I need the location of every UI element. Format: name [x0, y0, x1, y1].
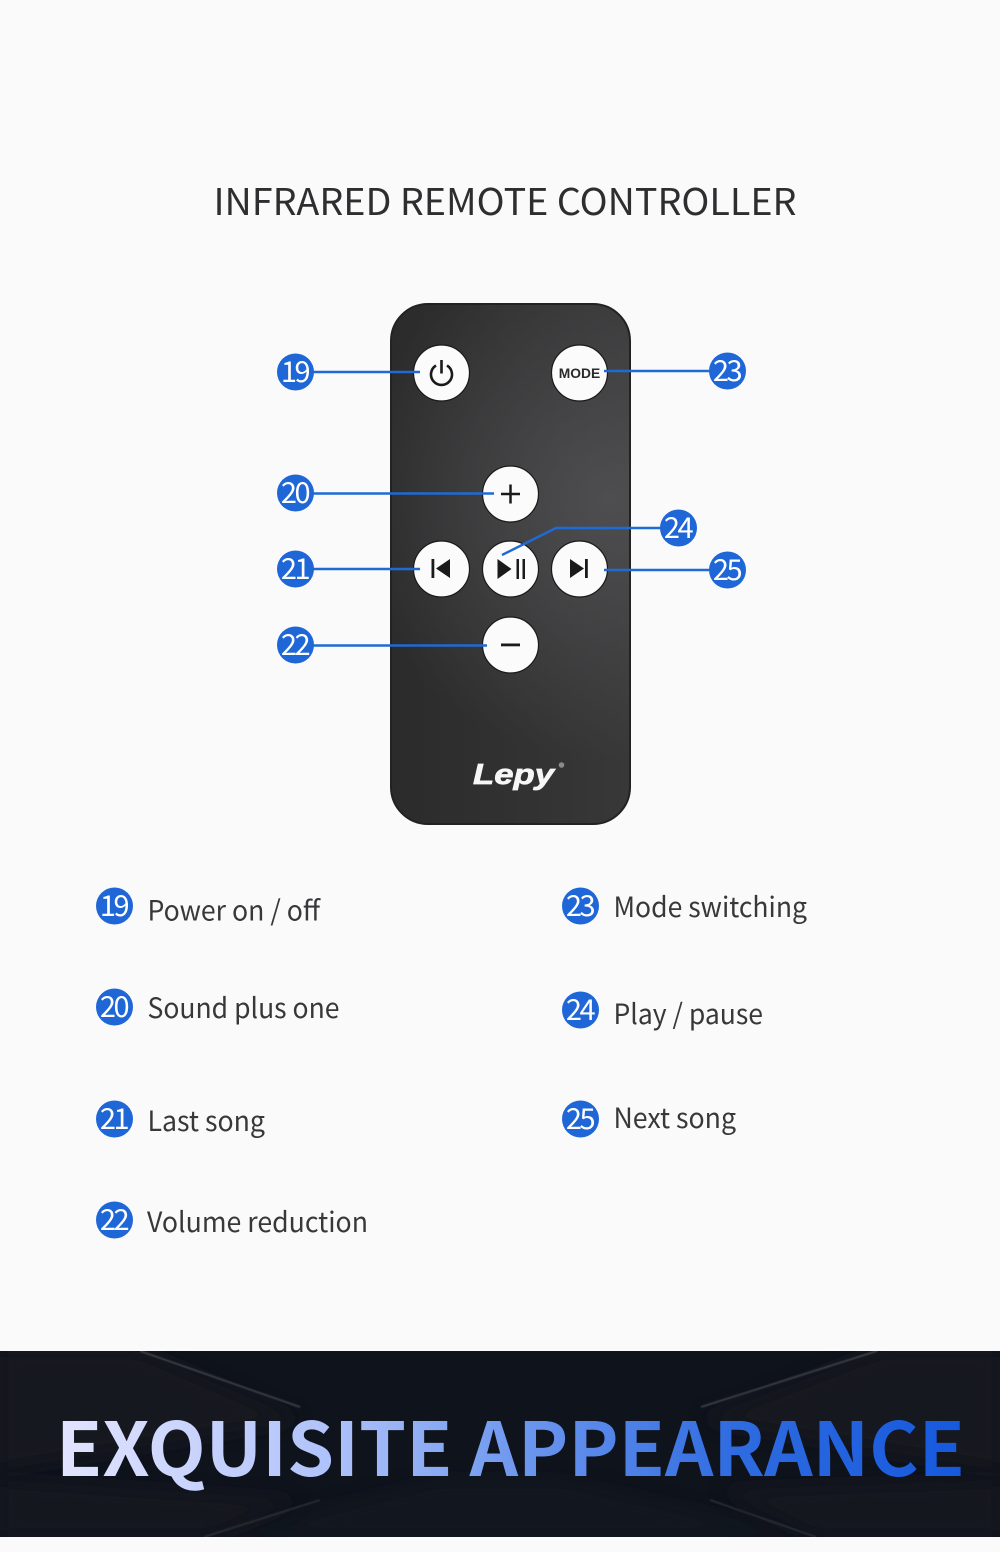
- legend item 23: Mode switching: [614, 886, 807, 926]
- button: previous: [414, 541, 470, 597]
- legend item 25: 25: [566, 1096, 594, 1138]
- button: next: [552, 541, 608, 597]
- banner heading: EXQUISITE APPEARANCE: [56, 1391, 965, 1498]
- legend item 22: Volume reduction: [147, 1201, 368, 1241]
- legend item 20: Sound plus one: [148, 987, 340, 1027]
- button: power: [414, 345, 470, 401]
- legend item 21: 21: [100, 1096, 128, 1138]
- legend item 23: 23: [566, 883, 594, 925]
- legend item 21: Last song: [148, 1100, 265, 1140]
- legend item 24: 24: [566, 987, 595, 1029]
- legend item 19: 19: [100, 883, 128, 925]
- button: mode: [552, 345, 608, 401]
- remote body: [391, 304, 630, 824]
- badge 19: 19: [281, 349, 309, 391]
- legend item 19: Power on / off: [148, 890, 321, 930]
- badge 23: 23: [713, 348, 741, 390]
- remote control: [391, 304, 630, 824]
- legend item 25: Next song: [614, 1097, 736, 1137]
- title: INFRARED REMOTE CONTROLLER: [214, 172, 796, 226]
- legend item 24: Play / pause: [614, 993, 763, 1033]
- banner background: [0, 1351, 1000, 1537]
- legend item 25: [562, 1096, 736, 1138]
- banner: [0, 1351, 1000, 1537]
- leader lines: [313, 371, 710, 646]
- brand logo: Lepy: [473, 759, 556, 791]
- legend item 21: [96, 1096, 265, 1140]
- legend item 22: 22: [100, 1197, 128, 1239]
- button: play pause: [482, 541, 538, 597]
- button: minus: [482, 617, 538, 673]
- badge 24: 24: [664, 505, 693, 547]
- legend item 24: [562, 987, 763, 1033]
- button: mode: MODE: [559, 366, 600, 381]
- badge 20: 20: [281, 470, 309, 512]
- badge 22: 22: [281, 622, 309, 664]
- legend: [96, 883, 807, 1241]
- legend item 19: [96, 883, 321, 930]
- badge 21: 21: [281, 546, 309, 588]
- callout badges on remote: [277, 348, 746, 664]
- badge 25: 25: [713, 547, 741, 589]
- legend item 20: 20: [100, 984, 128, 1026]
- button: plus: [482, 466, 538, 522]
